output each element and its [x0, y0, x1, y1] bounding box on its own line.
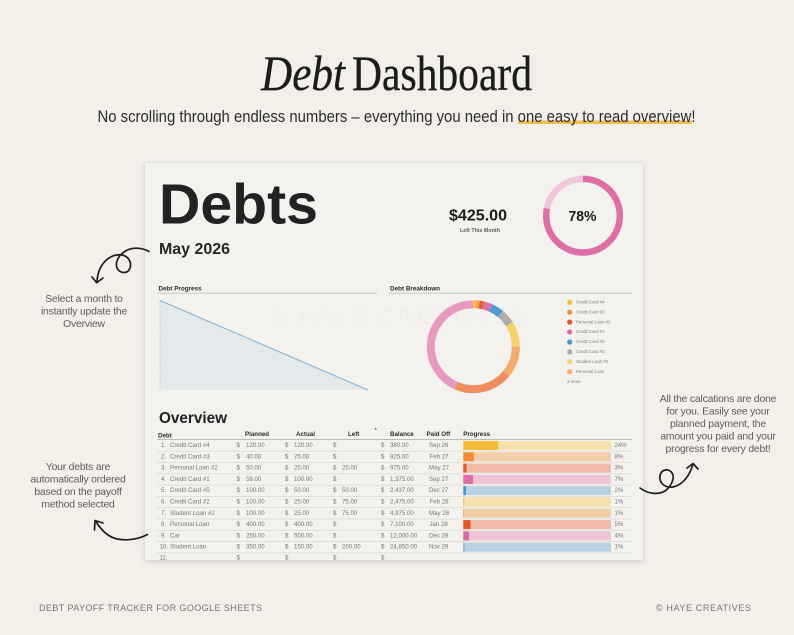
table row 3: 3. — [161, 465, 166, 472]
watermark: © HAYE CREATIVES — [271, 306, 525, 329]
heading: Overview: Overview — [159, 410, 228, 427]
callout: debts ordered: automatically ordered — [30, 474, 126, 486]
callout: select a month — [41, 294, 127, 330]
table row 3: $ — [381, 465, 385, 472]
table row 8: $ — [333, 521, 337, 528]
footer: product name: DEBT PAYOFF TRACKER FOR GOOGLE SHEETS — [39, 603, 262, 613]
table row 3: $ — [333, 465, 337, 472]
table header — [157, 428, 632, 440]
table row 1: Sep 26 — [429, 442, 449, 449]
table row 2: $ — [285, 453, 289, 460]
legend: debt breakdown: Credit Card #1 — [576, 329, 605, 334]
table row 10: $ — [333, 544, 337, 551]
table row 7: 100.00 — [246, 510, 265, 517]
table row 5: 5. — [161, 487, 166, 494]
legend: debt breakdown — [567, 300, 611, 384]
table row 8: $ — [381, 521, 385, 528]
table row 7: May 28 — [429, 510, 450, 517]
metric: left this month: $425.00 — [449, 208, 507, 224]
table row 1 — [161, 441, 627, 450]
table row 3: $ — [285, 465, 289, 472]
table row 1: 380.00 — [390, 442, 409, 449]
table row 10: 350.00 — [246, 544, 265, 551]
table row 5: Credit Card #5 — [170, 487, 210, 494]
callout: calculations: for you. Easily see your — [666, 406, 770, 418]
legend: debt breakdown: 2 more — [567, 379, 581, 384]
month selector: May 2026 — [159, 241, 230, 258]
table row 8: $ — [236, 521, 240, 528]
table row 5: 2% — [614, 487, 624, 494]
table row 3 — [161, 464, 624, 473]
table row 6: $ — [333, 498, 337, 506]
table row 9: 500.00 — [294, 532, 313, 539]
callout: debts ordered: Your debts are — [46, 462, 111, 473]
table row 11: $ — [333, 554, 337, 562]
table row 2: $ — [381, 453, 385, 460]
table row 10: 200.00 — [342, 544, 361, 551]
subtitle with highlighted phrase: No scrolling through endless numbers – everything you need in one easy to read overview! — [98, 107, 696, 126]
table row 2: 40.00 — [246, 453, 262, 460]
table row 7 — [161, 509, 624, 518]
table row 4: 7% — [614, 476, 624, 483]
callout: calculations: planned payment, the — [670, 419, 766, 430]
chart: debt progress — [157, 286, 377, 390]
table row 8: Personal Loan — [170, 521, 209, 528]
table row 5: 2,437.00 — [390, 487, 414, 494]
table row 4 — [161, 475, 624, 484]
table header: Paid Off — [426, 431, 451, 438]
callout: calculations: All the calcations are done — [660, 394, 777, 405]
table row 10 — [160, 543, 624, 552]
table row 8: 8. — [161, 521, 166, 528]
table row lines — [157, 451, 632, 553]
table row 8 — [161, 520, 624, 529]
table row 7: 1% — [614, 510, 624, 517]
chart: debt breakdown donut — [388, 286, 632, 389]
callout: select a month: Overview — [63, 319, 106, 330]
table row 5: $ — [381, 487, 385, 494]
table row 5: $ — [285, 487, 289, 494]
table row 2: $ — [333, 453, 337, 460]
callout: debts ordered: based on the payoff — [34, 487, 122, 498]
table row 7: $ — [381, 510, 385, 517]
title: Debt — [260, 45, 346, 101]
table row 3: May 27 — [429, 465, 450, 472]
table row 5: Dec 27 — [429, 487, 449, 494]
table row 9: Dec 28 — [429, 532, 449, 539]
table row 3: 975.00 — [390, 465, 409, 472]
table row 9: $ — [236, 532, 240, 539]
table row 1: $ — [236, 442, 240, 449]
footer: copyright: © HAYE CREATIVES — [656, 603, 751, 613]
table row 9: 9. — [161, 532, 166, 539]
table row 3: $ — [236, 465, 240, 472]
table row 9 — [161, 531, 624, 540]
callout: calculations — [660, 394, 777, 455]
table row 2: 925.00 — [390, 453, 409, 460]
table header: Planned — [245, 431, 269, 438]
table row 8: 7,100.00 — [390, 521, 414, 528]
table row 2: $ — [236, 453, 240, 460]
table row 6: 1% — [614, 498, 624, 506]
callout: debts ordered — [30, 462, 126, 510]
table row 7: $ — [285, 510, 289, 517]
table row 8: 5% — [614, 521, 624, 528]
table row 9: 4% — [614, 532, 624, 539]
table row 6 — [161, 498, 624, 506]
heading: Debts: Debts — [159, 172, 318, 236]
table header: Debt — [158, 432, 172, 440]
table row 7: 4,975.00 — [390, 510, 414, 517]
table row 10: Student Loan — [170, 544, 206, 551]
table row 11: 11. — [160, 554, 168, 562]
table row 7: 25.00 — [294, 510, 310, 517]
table row 1: 120.00 — [294, 442, 313, 449]
table row 6: 75.00 — [342, 498, 358, 506]
callout: select a month: instantly update the — [41, 306, 127, 318]
table row 9: Car — [170, 532, 180, 539]
table row 10: Nov 29 — [429, 544, 449, 551]
table row 1: 24% — [614, 442, 627, 449]
arrow: to overview order — [94, 520, 148, 540]
table row 9: $ — [285, 532, 289, 539]
table row 9: 250.00 — [246, 532, 265, 539]
legend: debt breakdown: Personal Loan #2 — [576, 319, 611, 324]
table row 4: 100.00 — [294, 476, 313, 483]
title — [260, 45, 532, 101]
table row 3: Personal Loan #2 — [170, 465, 218, 472]
table row 3: 3% — [614, 465, 624, 472]
table header: Left — [348, 431, 359, 438]
table row 2 — [161, 452, 624, 461]
table row 4: 1,375.00 — [390, 476, 414, 483]
table row 7: $ — [236, 510, 240, 517]
callout: calculations: progress for every debt! — [666, 444, 770, 455]
table row 10: $ — [381, 544, 385, 551]
table row 7: Student Loan #2 — [170, 510, 215, 517]
table row 7: $ — [333, 510, 337, 517]
table row 10: $ — [285, 544, 289, 551]
table row 11 — [160, 554, 385, 562]
callout: select a month: Select a month to — [45, 294, 123, 305]
table row 2: Credit Card #3 — [170, 453, 210, 460]
table row 3: 50.00 — [246, 465, 262, 472]
arrow: to month selector — [92, 248, 149, 283]
legend: debt breakdown: Credit Card #3 — [576, 309, 605, 314]
table row 4: Sep 27 — [429, 476, 449, 483]
table row 1: $ — [381, 442, 385, 449]
table row 6: $ — [236, 498, 240, 506]
table row 10: 24,850.00 — [390, 544, 418, 551]
chart: debt progress: Debt Progress — [158, 286, 202, 292]
chart: debt breakdown donut: Debt Breakdown — [390, 286, 440, 292]
legend: debt breakdown: Personal Loan — [576, 369, 605, 374]
table row 3: 25.00 — [342, 465, 358, 472]
table header: Actual — [296, 431, 315, 438]
table row 4: Credit Card #1 — [170, 476, 210, 483]
table row 8: 400.00 — [294, 521, 313, 528]
metric: left this month — [449, 208, 507, 234]
table row 4: $ — [285, 476, 289, 483]
table row 6: $ — [285, 498, 289, 506]
table row 2: 8% — [614, 453, 624, 460]
table row 9: 12,000.00 — [390, 532, 418, 539]
table row 7: 75.00 — [342, 510, 358, 517]
table row 5: 100.00 — [246, 487, 265, 494]
table row 6: Credit Card #2 — [170, 498, 210, 506]
table row 6: 6. — [161, 498, 166, 506]
table row 10: 1% — [614, 544, 624, 551]
table row 3: 25.00 — [294, 465, 310, 472]
table row 8: 400.00 — [246, 521, 265, 528]
table row 4: $ — [236, 476, 240, 483]
table row 5: $ — [333, 487, 337, 494]
table row 9: $ — [333, 532, 337, 539]
table row 4: $ — [381, 476, 385, 483]
legend: debt breakdown: Credit Card #4 — [576, 300, 605, 304]
table row 6: $ — [381, 498, 385, 506]
table row 8: $ — [285, 521, 289, 528]
table row 6: Feb 28 — [430, 498, 449, 506]
table row 5 — [161, 486, 624, 495]
table row 2: 2. — [161, 453, 166, 460]
metric: left this month: Left This Month — [460, 228, 500, 234]
table header: Progress — [463, 431, 491, 438]
legend: debt breakdown: Student Loan #2 — [576, 359, 609, 364]
table row 4: $ — [333, 476, 337, 483]
table row 1: $ — [333, 442, 337, 449]
table row 11: $ — [381, 554, 385, 562]
table row 4: 59.00 — [246, 476, 262, 483]
table row 5: $ — [236, 487, 240, 494]
table row 2: Feb 27 — [430, 453, 449, 460]
table row 4: 4. — [161, 476, 166, 483]
table row 1: Credit Card #4 — [170, 442, 210, 449]
callout: debts ordered: method selected — [41, 500, 115, 510]
table row 6: 25.00 — [294, 498, 310, 506]
panel: dashboard sheet — [145, 163, 643, 562]
table row 10: 150.00 — [294, 544, 313, 551]
table row 7: 7. — [161, 510, 166, 517]
table header: Balance — [390, 431, 414, 438]
gauge: 78 percent — [546, 179, 620, 252]
table row 6: 100.00 — [246, 498, 265, 506]
table row 2: 75.00 — [294, 453, 310, 460]
legend: debt breakdown: Credit Card #2 — [576, 349, 605, 354]
table row 1: 1. — [161, 442, 166, 449]
table row 5: 50.00 — [294, 487, 310, 494]
gauge: 78 percent: 78% — [568, 208, 596, 225]
legend: debt breakdown: Credit Card #5 — [576, 339, 605, 344]
table row 6: 2,475.00 — [390, 498, 414, 506]
table row 9: $ — [381, 532, 385, 539]
title: Dashboard — [352, 45, 532, 101]
table row 10: 10. — [160, 544, 168, 551]
table row 11: $ — [236, 554, 240, 562]
table row 8: Jan 28 — [430, 521, 448, 528]
table row 5: 50.00 — [342, 487, 358, 494]
callout: calculations: amount you paid and your — [660, 432, 776, 442]
table row 1: 120.00 — [246, 442, 265, 449]
table row 11: $ — [285, 554, 289, 562]
table row 10: $ — [236, 544, 240, 551]
table row 1: $ — [285, 442, 289, 449]
arrow: to progress bars — [640, 464, 698, 493]
